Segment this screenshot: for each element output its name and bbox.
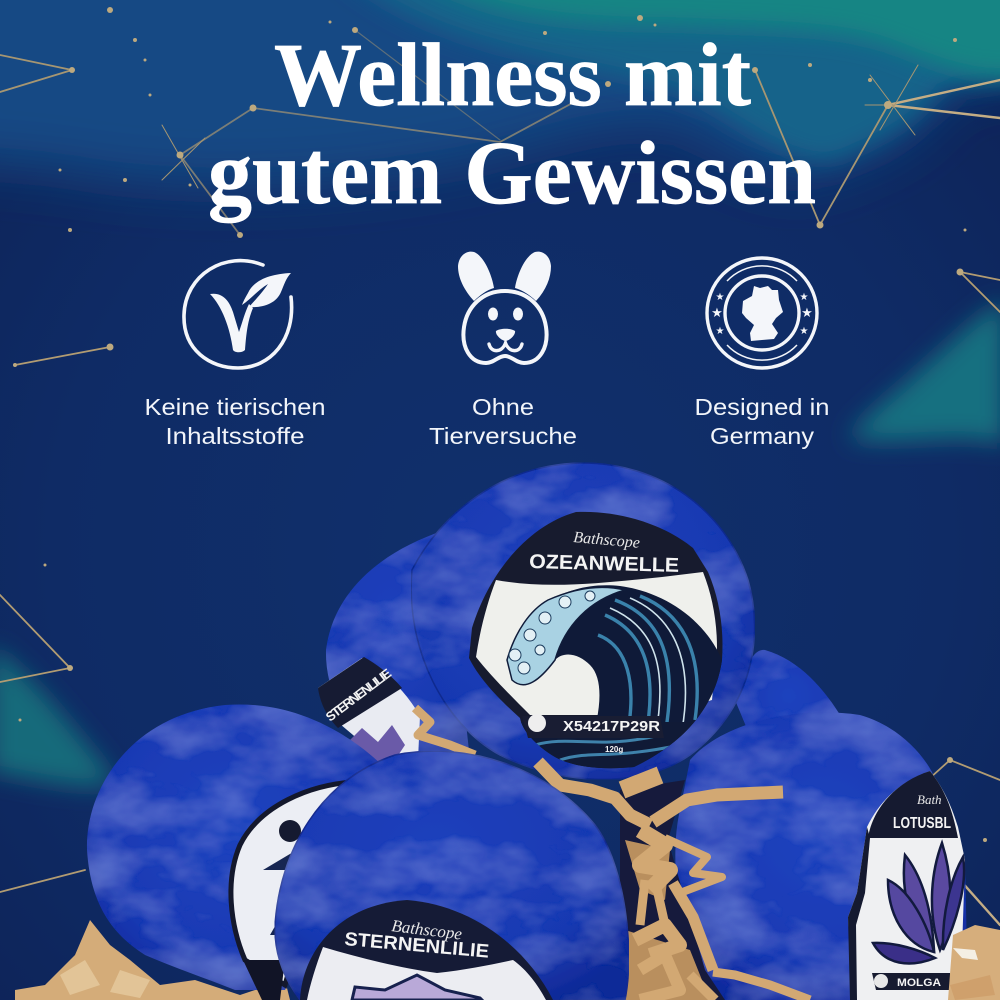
label: Sternenlilie sticker <box>300 900 553 1000</box>
bath bomb: top, Ozeanwelle <box>411 463 755 779</box>
bath bomb: front, Sternenlilie <box>275 751 629 1000</box>
shredded paper: bottom right <box>948 925 1000 1000</box>
icon: vegan leaf V <box>184 261 292 368</box>
caption: ohne Tierversuche <box>429 394 577 449</box>
caption: ohne Tierversuche: Tierversuche <box>429 423 577 449</box>
label: Lotus sticker: LOTUSBL <box>893 815 951 832</box>
shredded paper: center, between bath bombs <box>538 762 810 1000</box>
icon: Germany seal: ★ <box>716 326 725 337</box>
caption: keine tierischen Inhaltsstoffe <box>144 394 326 449</box>
caption: designed in Germany <box>694 394 830 449</box>
icon: rabbit <box>458 252 551 363</box>
label: Lotus sticker: Bath <box>917 792 942 807</box>
batch code bar: 120g <box>605 745 623 754</box>
batch code bar <box>522 714 664 754</box>
batch code bar: X54217P29R <box>563 719 661 735</box>
caption: ohne Tierversuche: Ohne <box>472 394 534 420</box>
bath bomb: right with Lotus label <box>675 712 968 1000</box>
icon: Germany seal: ★ <box>801 306 813 321</box>
label: Lotus sticker: MOLGA <box>897 977 941 989</box>
title: Wellness mit <box>274 26 751 125</box>
title <box>208 26 816 223</box>
icon: Germany seal: ★ <box>800 326 809 337</box>
label brand: Bathscope <box>391 916 464 944</box>
caption: keine tierischen Inhaltsstoffe: Keine tierischen <box>144 394 326 420</box>
shredded paper: bottom left <box>15 920 290 1000</box>
title: gutem Gewissen <box>208 124 816 223</box>
icon: Germany seal: ★ <box>716 292 725 303</box>
bath bomb: back left with Sternenlilie label: STERNENLILIE <box>323 665 394 724</box>
label name: STERNENLILIE <box>344 929 490 963</box>
caption: designed in Germany: Germany <box>710 423 815 449</box>
label brand: Bathscope <box>573 529 641 552</box>
icon: Germany seal: ★ <box>800 292 809 303</box>
label: left sticker <box>231 782 353 1000</box>
label name: OZEANWELLE <box>529 551 679 577</box>
caption: keine tierischen Inhaltsstoffe: Inhaltsstoffe <box>166 423 304 449</box>
wave illustration <box>507 585 722 770</box>
bath bomb: back right <box>735 650 842 760</box>
caption: designed in Germany: Designed in <box>694 394 830 420</box>
lotus illustration <box>352 975 482 1000</box>
shredded paper: left by back ball <box>415 708 475 755</box>
bath bomb: left <box>87 704 382 1000</box>
icon: Germany seal: ★ <box>711 306 723 321</box>
bath bomb: back left with Sternenlilie label <box>318 530 470 765</box>
icon: Germany seal <box>707 258 817 368</box>
label: Lotus sticker <box>848 771 965 1000</box>
lotus illustration <box>873 843 964 963</box>
teal watercolor clouds <box>0 0 1000 787</box>
label: Ozeanwelle sticker <box>469 512 722 770</box>
